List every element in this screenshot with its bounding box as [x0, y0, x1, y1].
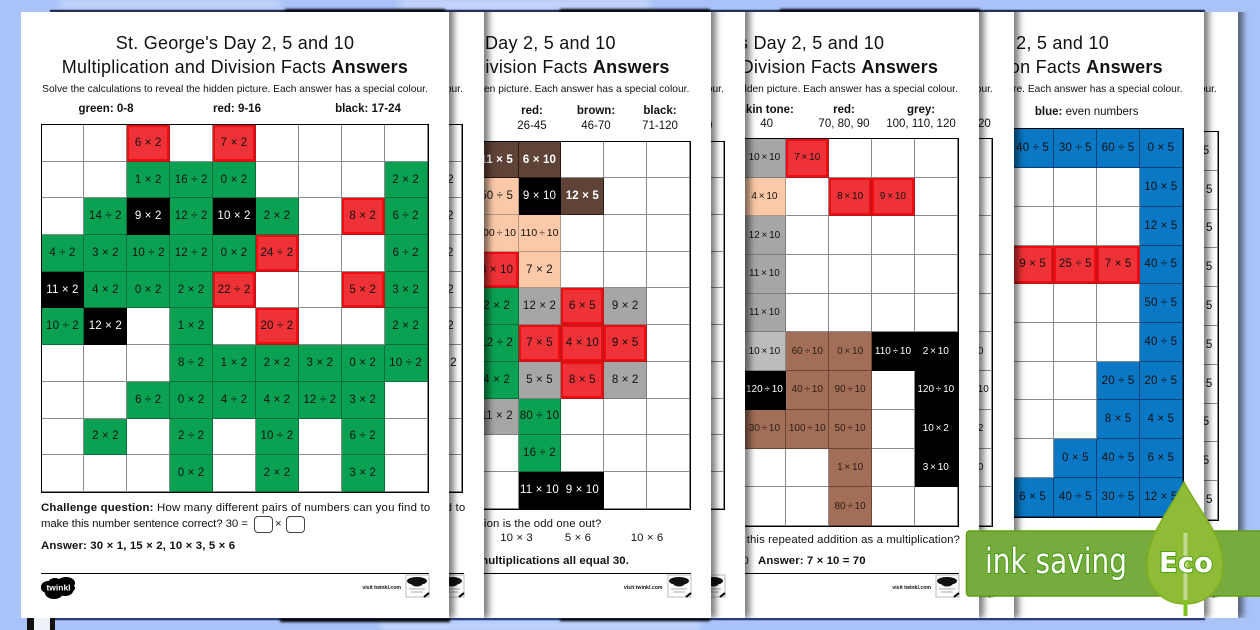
- answer grid: 11 × 2: [480, 410, 513, 422]
- answer grid: 0 × 5: [1147, 142, 1174, 154]
- footer rule: [745, 573, 959, 574]
- answer grid: 10 ÷ 2: [132, 247, 165, 259]
- answer grid: 60 ÷ 10: [792, 346, 823, 357]
- footer rule: [76, 573, 464, 574]
- answer grid: 40 ÷ 10: [792, 384, 823, 395]
- answer grid: 5 × 5: [526, 374, 553, 386]
- answer grid edge: [711, 141, 725, 510]
- colour key: 40: [760, 118, 773, 130]
- answer grid: 6 ÷ 2: [392, 210, 419, 222]
- footer badge: [936, 574, 960, 598]
- colour key: 71-120: [677, 120, 712, 132]
- answer grid: 12 ÷ 2: [303, 394, 336, 406]
- colour key: 46-70: [581, 120, 611, 132]
- answer grid: 7 × 5: [1105, 258, 1131, 270]
- panel: worksheet 1 dragon: [21, 0, 449, 618]
- answer grid edge: [1204, 131, 1219, 521]
- answer grid: 9 × 5: [612, 337, 638, 349]
- title: Multiplication and Division Facts Answers: [62, 57, 408, 77]
- answer grid: 8 × 5: [569, 374, 596, 386]
- answer grid edge: 2 × 2: [427, 320, 454, 332]
- answer grid: 40 ÷ 5: [1016, 142, 1049, 154]
- number sentence with answer boxes: make this number sentence correct? 30 =: [41, 518, 248, 530]
- title: St. George's Day 2, 5 and 10: [377, 33, 616, 53]
- answer grid: 4 × 10: [751, 191, 777, 202]
- colour key: 71-120: [642, 120, 678, 132]
- answer grid edge: 50 ÷ 5: [1180, 300, 1212, 312]
- colour key: [745, 104, 956, 128]
- answer grid: 6 × 2: [135, 137, 162, 149]
- answer grid edge: [979, 138, 993, 527]
- multiplication options: [501, 534, 663, 541]
- footer badge: [406, 574, 430, 598]
- answer grid: 0 × 10: [837, 346, 863, 357]
- answer grid: 8 × 2: [612, 374, 638, 386]
- answer grid: 2 × 2: [264, 357, 290, 369]
- answer grid: 8 ÷ 2: [178, 357, 204, 369]
- footer link: visit twinkl.com: [362, 585, 401, 591]
- answer grid: 120 ÷ 10: [746, 384, 783, 395]
- answer grid: 2 × 2: [483, 300, 510, 312]
- footer rule: [484, 573, 691, 574]
- footer rule: [41, 573, 429, 574]
- answer grid edge: 120 ÷ 10: [952, 384, 989, 395]
- answer grid: 10 ÷ 2: [389, 357, 422, 369]
- answer grid: 0 × 2: [349, 357, 376, 369]
- panel: worksheet 3 knight: [745, 12, 988, 618]
- answer grid: 50 ÷ 10: [834, 423, 866, 434]
- answer grid edge: 6 ÷ 2: [427, 247, 454, 259]
- answer grid: 40 ÷ 5: [1144, 258, 1177, 270]
- answer grid: 3 × 2: [92, 247, 119, 259]
- answer grid: 11 × 5: [480, 154, 513, 166]
- answer grid: 4 ÷ 2: [221, 394, 247, 406]
- answer grid: 16 ÷ 2: [175, 174, 208, 186]
- answer grid edge: 20 ÷ 5: [1180, 378, 1212, 390]
- answer: Answer: 10 × 6. The other multiplications all equal 30.: [334, 555, 629, 567]
- answer grid: [1012, 129, 1183, 517]
- answer grid: 4 × 2: [264, 394, 290, 406]
- answer grid: 12 × 2: [89, 320, 122, 332]
- answer grid: 7 × 2: [526, 264, 553, 276]
- colour key: [518, 105, 678, 129]
- answer grid: 90 ÷ 10: [834, 384, 866, 395]
- answer grid: 14 ÷ 2: [89, 210, 122, 222]
- answer grid: 11 × 10: [520, 484, 559, 496]
- answer grid edge: 40 ÷ 5: [1180, 339, 1212, 351]
- answer grid: 11 × 10: [749, 268, 780, 279]
- title: [745, 36, 938, 73]
- answer grid: 5 × 2: [349, 284, 376, 296]
- instruction text: Solve the calculations to reveal the hidden picture. Each answer has a special colour.: [304, 84, 689, 95]
- answer grid: 2 × 2: [264, 210, 290, 222]
- answer grid: 4 × 10: [566, 337, 599, 349]
- answer: Answer: 30 × 1, 15 × 2, 10 × 3, 5 × 6: [41, 540, 235, 552]
- answer grid: 0 × 2: [178, 394, 204, 406]
- answer grid: 2 × 2: [92, 430, 119, 442]
- footer link: visit twinkl.com: [892, 585, 931, 591]
- answer grid: 0 × 2: [178, 467, 204, 479]
- answer grid: 2 × 2: [392, 320, 419, 332]
- title: St. George's Day 2, 5 and 10: [870, 33, 1109, 53]
- repeated addition sum: 10 + 10 + 10 + 10 + 10 + 10 + 10 = 70: [553, 555, 749, 567]
- instruction text: Solve the calculations to reveal the hidden picture. Each answer has a special colour.: [797, 84, 1183, 95]
- answer grid: 1 × 10: [837, 462, 863, 473]
- colour key: 100, 110, 120: [886, 118, 956, 130]
- answer grid: 40 ÷ 5: [1102, 452, 1134, 464]
- answer grid edge: 40 ÷ 5: [1180, 261, 1212, 273]
- answer grid: 7 × 10: [794, 152, 820, 163]
- answer grid: 16 ÷ 2: [523, 447, 556, 459]
- title: Multiplication and Division Facts Answers: [816, 57, 1163, 77]
- multiplication options: 10 × 6: [631, 532, 663, 544]
- colour key: black:: [643, 105, 677, 117]
- answer grid edge: 3 × 2: [427, 284, 454, 296]
- answer grid edge: 10 × 2: [957, 423, 983, 434]
- answer grid: 12 × 5: [1144, 491, 1177, 503]
- challenge question: Write the calculations as a repeated addition: [931, 530, 1160, 542]
- banner text: ink saving: [985, 542, 1127, 582]
- eco label: Eco: [1159, 546, 1213, 579]
- footer badge: [1208, 596, 1218, 598]
- answer grid: 4 × 2: [483, 374, 510, 386]
- answer grid: 4 × 5: [1147, 413, 1174, 425]
- answer grid: 12 ÷ 2: [175, 247, 208, 259]
- answer grid: 0 × 2: [221, 174, 247, 186]
- answer grid: 3 × 2: [392, 284, 419, 296]
- answer grid edge: 10 × 5: [1179, 184, 1213, 196]
- answer grid: 4 ÷ 2: [49, 247, 76, 259]
- answer grid: [476, 142, 690, 509]
- answer: Answer: 7 × 10 = 70: [758, 555, 866, 567]
- title: St. George's Day 2, 5 and 10: [116, 33, 354, 53]
- answer grid edge: 6 × 5: [1183, 455, 1209, 467]
- multiplication options: 5 × 6: [565, 532, 591, 544]
- answer grid: 120 ÷ 10: [917, 384, 954, 395]
- answer grid: 110 ÷ 10: [520, 227, 558, 239]
- instruction text: Solve the calculations to reveal the hidden picture. Each answer has a special colour.: [338, 84, 724, 95]
- answer grid edge: 12 × 5: [1179, 222, 1213, 234]
- colour key: 26-45: [517, 120, 547, 132]
- answer grid: 9 × 10: [523, 190, 556, 202]
- colour key: red: 9-16: [213, 103, 261, 115]
- answer grid: 9 × 2: [135, 210, 162, 222]
- answer grid: 8 × 5: [1105, 413, 1131, 425]
- colour key: red:: [833, 104, 855, 116]
- answer grid: 9 × 5: [1019, 258, 1046, 270]
- answer grid edge: 10 ÷ 2: [424, 357, 457, 369]
- answer grid: 80 ÷ 10: [834, 501, 866, 512]
- footer badge: [711, 574, 726, 598]
- title: St. George's Day 2, 5 and 10: [646, 33, 884, 53]
- answer grid: 0 × 5: [1062, 452, 1089, 464]
- number sentence with answer boxes: [42, 516, 305, 533]
- footer badge: [668, 574, 692, 598]
- answer grid: 7 × 5: [526, 337, 553, 349]
- answer grid: 1 × 2: [135, 174, 162, 186]
- answer grid edge: [420, 125, 462, 492]
- answer grid: 20 ÷ 5: [1102, 375, 1134, 387]
- answer grid: 20 ÷ 5: [1144, 375, 1177, 387]
- answer grid: 10 ÷ 2: [260, 430, 293, 442]
- answer grid: 30 ÷ 5: [1059, 142, 1092, 154]
- answer grid edge: 12 × 5: [1179, 494, 1213, 506]
- answer grid: 10 × 2: [923, 423, 949, 434]
- colour key: red:: [521, 105, 543, 117]
- colour key: black: 17-24: [335, 103, 401, 115]
- answer grid: [744, 139, 958, 526]
- answer grid: 12 ÷ 2: [480, 337, 513, 349]
- answer grid: 6 × 5: [1147, 452, 1174, 464]
- panel: worksheet 2 back copy: [711, 12, 754, 618]
- answer grid: 100 ÷ 10: [789, 423, 826, 434]
- banner bar: [966, 531, 1260, 596]
- title: [1014, 36, 1162, 73]
- answer grid: 12 × 5: [566, 190, 599, 202]
- answer grid: 10 ÷ 2: [46, 320, 79, 332]
- answer grid: 3 × 2: [306, 357, 333, 369]
- answer grid: 11 × 10: [749, 307, 780, 318]
- answer grid: 50 ÷ 5: [480, 190, 513, 202]
- answer grid: 6 ÷ 2: [392, 247, 419, 259]
- challenge question: Challenge question: How many different pairs of numbers can you find to: [41, 502, 430, 514]
- answer grid: 2 × 10: [923, 346, 949, 357]
- panel: worksheet 4 back copy: [1204, 12, 1248, 618]
- answer grid: 3 × 10: [480, 264, 513, 276]
- instruction text: Solve the calculations to reveal the hidden picture. Each answer has a special colour.: [831, 84, 1217, 95]
- answer grid: 12 × 10: [749, 230, 780, 241]
- challenge question: Challenge question: How many different pairs of numbers can you find to: [76, 502, 465, 514]
- answer grid: 10 × 10: [749, 346, 780, 357]
- answer grid: 9 × 2: [612, 300, 638, 312]
- answer grid: 1 × 2: [178, 320, 204, 332]
- answer grid: 100 ÷ 10: [477, 227, 516, 239]
- answer grid: 40 ÷ 5: [1144, 336, 1177, 348]
- answer grid: 4 × 2: [92, 284, 119, 296]
- answer grid: 50 ÷ 5: [1144, 297, 1177, 309]
- answer grid: 11 × 2: [46, 284, 79, 296]
- panel: worksheet 2 St George figure: [484, 12, 720, 618]
- answer grid: 12 ÷ 2: [175, 210, 208, 222]
- challenge question: Challenge question: Which multiplication is the odd one out?: [283, 518, 602, 530]
- answer grid edge: 3 × 10: [957, 462, 983, 473]
- answer grid: 9 × 10: [880, 191, 906, 202]
- title: Multiplication and Division Facts Answers: [592, 57, 938, 77]
- colour key: 70, 80, 90: [818, 118, 870, 130]
- answer grid edge: 0 × 5: [1183, 145, 1209, 157]
- answer grid: 1 × 2: [221, 357, 247, 369]
- answer grid: 20 ÷ 2: [260, 320, 293, 332]
- answer grid: 3 × 2: [349, 394, 376, 406]
- answer grid: 40 ÷ 5: [1059, 491, 1092, 503]
- title: [63, 36, 408, 77]
- title: Multiplication and Division Facts Answers: [323, 57, 670, 77]
- title: [484, 36, 669, 73]
- answer grid: 0 × 2: [221, 247, 247, 259]
- answer grid: 24 ÷ 2: [260, 247, 293, 259]
- panel: worksheet 3 back copy: [979, 12, 1024, 618]
- answer grid: 80 ÷ 10: [520, 410, 559, 422]
- colour key: skin tone:: [740, 104, 794, 116]
- icon: twinkl logo: twinkl: [46, 582, 71, 592]
- challenge question: Challenge question: Can you write this repeated addition as a multiplication?: [558, 534, 960, 546]
- footer badge: [449, 574, 465, 598]
- instruction text: Solve the calculations to reveal the hidden picture. Each answer has a special colour.: [607, 84, 993, 95]
- footer link: visit twinkl.com: [624, 585, 662, 591]
- answer grid: 10 × 10: [749, 152, 780, 163]
- answer grid edge: 2 × 2: [427, 174, 454, 186]
- answer grid: 9 × 10: [566, 484, 599, 496]
- answer grid edge: 4 × 5: [1183, 416, 1209, 428]
- answer grid: 6 ÷ 2: [350, 430, 376, 442]
- instruction text: Solve the calculations to reveal the hidden picture. Each answer has a special colour.: [572, 84, 958, 95]
- instruction text: Solve the calculations to reveal the hidden picture. Each answer has a special colour.: [77, 84, 463, 95]
- colour key: brown:: [577, 105, 615, 117]
- answer grid: 7 × 2: [221, 137, 247, 149]
- answer grid: [42, 125, 428, 492]
- answer grid: 30 ÷ 10: [749, 423, 780, 434]
- answer grid: 3 × 2: [349, 467, 376, 479]
- answer grid: 25 ÷ 5: [1059, 258, 1092, 270]
- answer grid: 12 × 2: [523, 300, 556, 312]
- panel: worksheet 1 back copy: [56, 0, 484, 618]
- panel: worksheet 4 knight and flag: [1014, 12, 1214, 618]
- icon: leaf: [1147, 482, 1223, 616]
- instruction text: Solve the calculations to reveal the hidden picture. Each answer has a special colour.: [42, 84, 428, 95]
- answer grid: 0 × 2: [135, 284, 162, 296]
- answer grid: 2 × 2: [178, 284, 204, 296]
- number sentence with answer boxes: ×: [275, 518, 282, 530]
- answer grid: 8 × 2: [349, 210, 376, 222]
- answer grid: 10 × 2: [217, 210, 251, 222]
- answer grid: 110 ÷ 10: [875, 346, 911, 357]
- colour key: green: 0-8: [79, 103, 133, 115]
- colour key: blue: even numbers: [1035, 106, 1138, 118]
- answer grid: 6 × 10: [523, 154, 556, 166]
- answer grid: 6 × 5: [569, 300, 596, 312]
- answer grid: 12 × 5: [1144, 220, 1177, 232]
- icon: twinkl logo: [41, 577, 75, 599]
- answer grid: 2 ÷ 2: [178, 430, 204, 442]
- colour key: grey:: [907, 104, 935, 116]
- footer badge: [979, 596, 994, 598]
- answer grid: 10 × 5: [1144, 181, 1177, 193]
- answer grid: 22 ÷ 2: [218, 284, 250, 296]
- answer grid: 60 ÷ 5: [1102, 142, 1134, 154]
- colour key: [78, 103, 401, 114]
- answer grid: 8 × 10: [837, 191, 863, 202]
- answer grid: 2 × 2: [264, 467, 290, 479]
- answer grid: 6 ÷ 2: [135, 394, 161, 406]
- multiplication options: 10 × 3: [500, 532, 533, 544]
- colour key: 100, 110, 120: [921, 118, 991, 130]
- answer grid edge: 2 × 10: [957, 346, 983, 357]
- answer grid edge: 6 ÷ 2: [427, 210, 454, 222]
- answer grid: 2 × 2: [392, 174, 419, 186]
- answer grid: 30 ÷ 5: [1102, 491, 1134, 503]
- answer grid: 6 × 5: [1019, 491, 1046, 503]
- answer grid: 3 × 10: [923, 462, 949, 473]
